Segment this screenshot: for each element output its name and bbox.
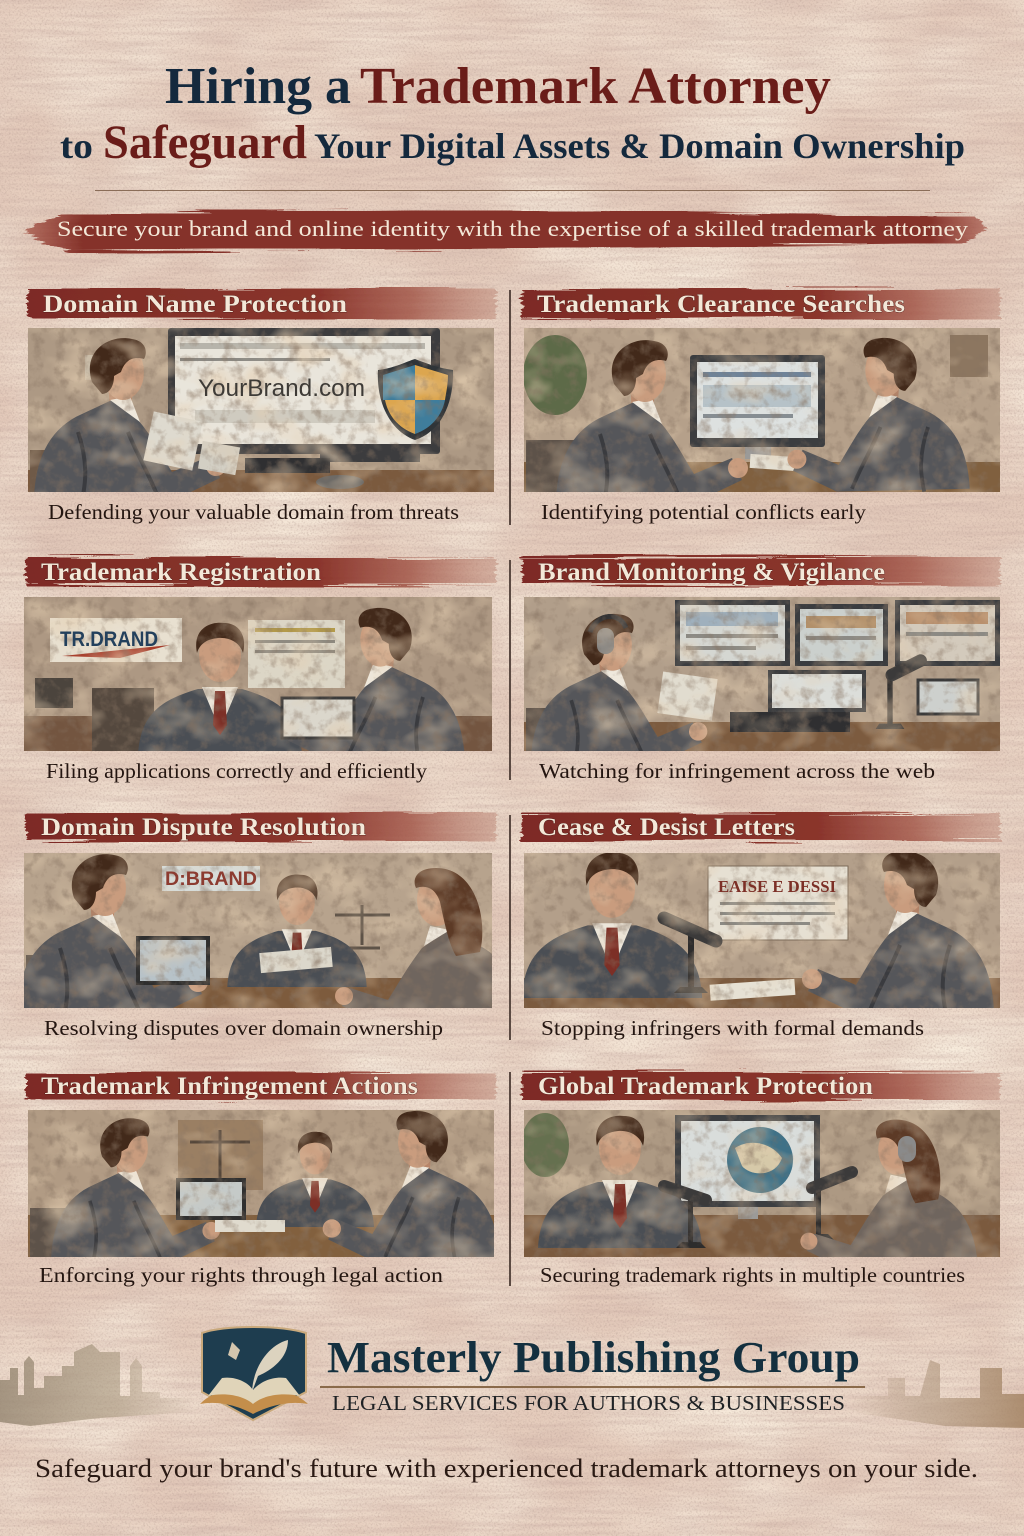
logo: shield with quill and open book bbox=[200, 1327, 308, 1420]
caption: Defending your valuable domain from threats bbox=[48, 500, 459, 524]
icon: globe bbox=[727, 1127, 793, 1193]
heading bar: Trademark Clearance Searches: Trademark Clearance Searches bbox=[537, 291, 905, 318]
company name: Masterly Publishing Group bbox=[327, 1333, 860, 1382]
closing line: Safeguard your brand's future with experienced trademark attorneys on your side. bbox=[35, 1454, 978, 1483]
heading bar: Brand Monitoring & Vigilance bbox=[522, 557, 1000, 586]
title: Your Digital Assets & Domain Ownership bbox=[314, 126, 965, 166]
caption: Enforcing your rights through legal action bbox=[39, 1263, 444, 1287]
illustration: legal team at a table with scales of justice bbox=[28, 1110, 499, 1261]
heading bar: Global Trademark Protection bbox=[522, 1072, 1000, 1100]
icon: headphones bbox=[898, 1136, 916, 1162]
heading bar: Brand Monitoring & Vigilance: Brand Monitoring & Vigilance bbox=[538, 559, 885, 586]
illustration: two attorneys reviewing a search on a monitor bbox=[523, 328, 1000, 502]
microphone: left bbox=[664, 1186, 706, 1248]
microphone: right bbox=[804, 1172, 852, 1240]
tagline: LEGAL SERVICES FOR AUTHORS & BUSINESSES bbox=[332, 1391, 845, 1415]
title: Trademark Attorney bbox=[360, 58, 831, 115]
texture over illustrations bbox=[24, 328, 1000, 1257]
illustration: attorney and client with wall sign bbox=[24, 597, 492, 762]
illustration: analyst with headphones watching three monitors bbox=[524, 597, 1000, 763]
heading bar: Domain Dispute Resolution: Domain Dispute Resolution bbox=[41, 814, 366, 841]
illustration: attorneys discussing a letter bbox=[522, 851, 1000, 1013]
heading bar: Cease & Desist Letters bbox=[522, 813, 1000, 841]
city skyline left bbox=[0, 1344, 195, 1426]
title: to bbox=[60, 126, 93, 166]
title: Hiring a bbox=[165, 58, 351, 115]
caption: Filing applications correctly and efficiently bbox=[46, 759, 428, 783]
screen label: YourBrand.com: YourBrand.com bbox=[198, 375, 365, 402]
heading bar: Trademark Registration bbox=[26, 557, 496, 586]
caption: Identifying potential conflicts early bbox=[541, 500, 867, 524]
heading bar: Domain Name Protection bbox=[28, 289, 496, 319]
caption: Securing trademark rights in multiple countries bbox=[540, 1263, 965, 1287]
panel: Trademark Registration bbox=[24, 557, 496, 783]
illustration: three people resolving a dispute bbox=[24, 853, 492, 1008]
wall sign: TR.DRAND: TR.DRAND bbox=[60, 628, 158, 651]
icon: shield bbox=[378, 359, 453, 440]
caption: Watching for infringement across the web bbox=[539, 759, 935, 783]
heading bar: Domain Name Protection: Domain Name Protection bbox=[43, 291, 347, 318]
heading bar: Trademark Infringement Actions: Trademark Infringement Actions bbox=[41, 1073, 418, 1100]
heading bar: Global Trademark Protection: Global Trademark Protection bbox=[538, 1073, 873, 1100]
microphone bbox=[664, 918, 716, 993]
heading bar: Trademark Clearance Searches bbox=[522, 289, 1000, 319]
heading bar: Trademark Registration: Trademark Registration bbox=[41, 559, 321, 586]
city skyline right bbox=[850, 1360, 1024, 1428]
panel: Brand Monitoring & Vigilance bbox=[522, 557, 1000, 783]
subtitle banner: Secure your brand and online identity with the expertise of a skilled trademark attorney bbox=[57, 216, 968, 241]
subtitle banner bbox=[24, 209, 988, 252]
icon: headphones bbox=[590, 616, 626, 632]
letter heading: EAISE E DESSI bbox=[718, 877, 836, 896]
illustration: two attorneys with a globe on screen bbox=[521, 1110, 1000, 1272]
panel: Domain Dispute Resolution bbox=[16, 813, 522, 1040]
title: Safeguard bbox=[103, 116, 307, 169]
caption: Resolving disputes over domain ownership bbox=[44, 1016, 443, 1040]
title bbox=[60, 58, 965, 169]
wall sign: D:BRAND: D:BRAND bbox=[165, 869, 257, 890]
heading bar: Cease & Desist Letters: Cease & Desist Letters bbox=[538, 814, 795, 841]
illustration: attorney at monitor with shield bbox=[28, 328, 494, 500]
panel: Cease & Desist Letters bbox=[522, 813, 1000, 1040]
panel: Trademark Infringement Actions bbox=[26, 1072, 499, 1287]
panel: Global Trademark Protection bbox=[521, 1072, 1000, 1287]
caption: Stopping infringers with formal demands bbox=[541, 1016, 924, 1040]
heading bar: Domain Dispute Resolution bbox=[26, 813, 496, 841]
panel: Domain Name Protection bbox=[28, 289, 496, 524]
panel: Trademark Clearance Searches bbox=[522, 289, 1000, 524]
